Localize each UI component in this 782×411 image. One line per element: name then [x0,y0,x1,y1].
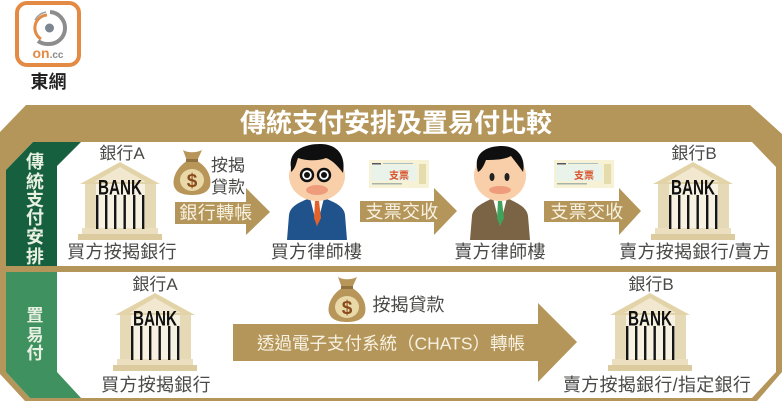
side label: e-payment: 易 [26,326,44,345]
bank A top: 買方按揭銀行 [67,242,177,262]
bank B bottom: BANK [628,308,672,330]
icon: money bag bottom: $ [342,298,353,319]
panel: traditional arrangement [6,142,776,266]
bank B bottom: 銀行B [628,275,674,294]
arrow: bank transfer: 銀行轉帳 [179,203,253,223]
side label: traditional: 支 [26,190,44,210]
bank B top [619,144,771,262]
bank A bottom: 買方按揭銀行 [101,375,211,395]
side label: traditional: 付 [26,208,44,228]
logo wordmark: on.cc [32,45,64,61]
side label: e-payment: 付 [26,344,44,363]
side label panel: e-payment [6,272,81,398]
bank B top: BANK [671,176,715,200]
bank B top: 銀行B [671,144,717,163]
comparison frame [0,105,782,401]
bank B bottom: 賣方按揭銀行/指定銀行 [563,375,751,395]
bank A top [67,144,177,262]
icon: cheque 1: 支票 [389,169,409,182]
bank A top: BANK [98,176,142,200]
icon: money bag top: $ [187,171,198,192]
side label panel: traditional [6,142,81,266]
side label: e-payment: 置 [26,306,44,325]
side label: e-payment [26,306,44,363]
arrow: cheque exchange 2: 支票交收 [550,202,624,222]
logo caption: 東網 [30,72,66,92]
panel: e-payment arrangement [6,272,776,398]
logo: on.cc [17,3,79,65]
arrow: bank transfer [175,188,270,235]
bank A bottom: 銀行A [132,275,178,294]
arrow: cheque exchange 2 [544,188,641,235]
mortgage label top: 貸款 [211,178,245,197]
title: 傳統支付安排及置易付比較 [240,108,552,138]
bank A top: 銀行A [99,144,145,163]
arrow: cheque exchange 1 [360,188,457,235]
arrow: CHATS transfer: 透過電子支付系統（CHATS）轉帳 [257,334,525,354]
icon: cheque 2 [554,160,614,188]
arrow: cheque exchange 1: 支票交收 [365,202,439,222]
side label: traditional: 安 [26,226,44,247]
side label: traditional: 統 [26,171,44,192]
mortgage label bottom: 按揭貸款 [372,295,444,315]
person: buyer lawyer: 買方律師樓 [271,242,362,262]
person: seller lawyer: 賣方律師樓 [454,242,546,262]
mortgage label top: 按揭 [211,156,245,175]
side label: traditional: 排 [26,247,44,267]
arrow: CHATS transfer [233,303,577,382]
bank A bottom: BANK [133,308,177,330]
bank B bottom [563,275,751,395]
bank A bottom [101,275,211,395]
side label: traditional: 傳 [26,152,44,172]
person: buyer lawyer [271,144,362,262]
icon: money bag bottom [329,277,365,322]
bank B top: 賣方按揭銀行/賣方 [619,242,771,262]
side label: traditional [26,152,44,267]
icon: money bag top [174,150,210,195]
mortgage label top [211,156,245,197]
icon: cheque 2: 支票 [574,169,594,182]
icon: logo rings [35,12,65,44]
person: seller lawyer [454,146,546,262]
icon: cheque 1 [369,160,429,188]
